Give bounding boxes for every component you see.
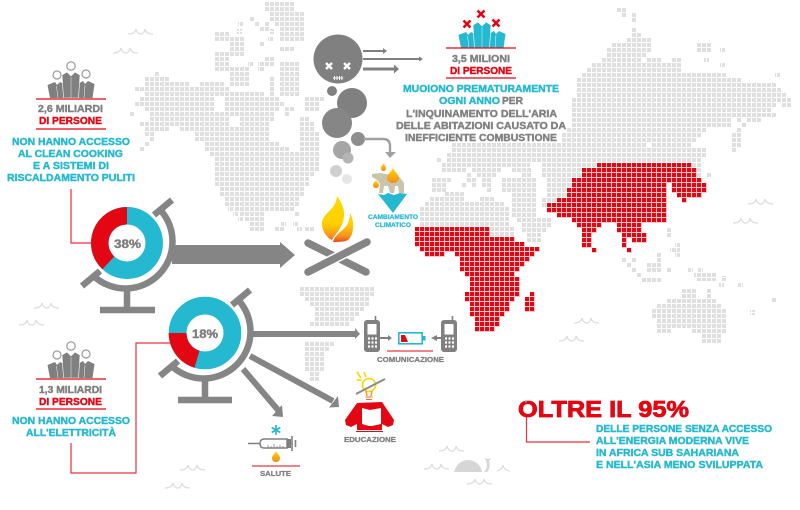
map: africa	[415, 192, 540, 332]
chart: globe donut 38%	[82, 200, 172, 310]
icon: climate change bear: CAMBIAMENTO	[368, 214, 418, 221]
text block: 2,6 miliardi: NON HANNO ACCESSO	[12, 137, 130, 148]
icon: people with red crosses	[458, 10, 506, 48]
text block: 2,6 miliardi: E A SISTEMI DI	[33, 161, 109, 172]
arrows: electricity outcomes	[243, 328, 360, 417]
icon: health	[248, 425, 300, 478]
callout: 95%: OLTRE IL 95%	[518, 396, 689, 422]
text block: 1,3 miliardi: DI PERSONE	[39, 397, 102, 408]
text block: 2,6 miliardi: DI PERSONE	[39, 116, 102, 127]
arrow: to fire	[172, 242, 295, 268]
icon: whale	[454, 458, 491, 472]
icon: climate change bear	[368, 163, 418, 229]
text block: 1,3 miliardi: ALL'ELETTRICITÀ	[26, 426, 117, 439]
connector: 38%	[71, 189, 92, 243]
chart: globe donut 18%	[160, 290, 250, 400]
icon: people lower	[48, 342, 94, 378]
callout: 95%	[518, 396, 772, 471]
callout: 95%: E NELL'ASIA MENO SVILUPPATA	[596, 460, 764, 471]
text block: 2,6 miliardi: 2,6 MILIARDI	[38, 104, 103, 115]
text block: 3,5 milioni: L'INQUINAMENTO DELL'ARIA	[406, 109, 558, 120]
text block: 1,3 miliardi: 1,3 MILIARDI	[39, 385, 102, 396]
text block: 3,5 milioni: DI PERSONE	[450, 66, 512, 77]
map: eurasia	[432, 8, 792, 315]
icon: skull smoke	[314, 34, 423, 184]
connector: 18%	[71, 343, 170, 473]
icon: fire	[308, 196, 367, 272]
chart: globe donut 38%: 38%	[114, 239, 141, 251]
text block: 3,5 milioni: DELLE ABITAZIONI CAUSATO DA	[396, 121, 567, 132]
text block: 3,5 milioni: OGNI ANNO	[439, 96, 500, 107]
world map	[130, 2, 792, 382]
text block: 3,5 milioni	[396, 10, 567, 144]
text block: 3,5 milioni: MUOIONO PREMATURAMENTE	[403, 84, 559, 95]
icon: communication	[364, 316, 457, 364]
map: australia	[652, 289, 727, 344]
icon: education: EDUCAZIONE	[344, 435, 396, 444]
text block: 1,3 miliardi: NON HANNO ACCESSO	[12, 416, 130, 427]
text block: 2,6 miliardi: RISCALDAMENTO PULITI	[7, 173, 135, 184]
callout: 95%: IN AFRICA SUB SAHARIANA	[596, 448, 740, 459]
text block: 3,5 milioni: PER	[502, 96, 524, 107]
icon: communication: COMUNICAZIONE	[377, 355, 444, 364]
text block: 3,5 milioni: INEFFICIENTE COMBUSTIONE	[405, 133, 557, 144]
text block: 2,6 miliardi: AL CLEAN COOKING	[18, 149, 123, 160]
text block: 3,5 milioni: 3,5 MILIONI	[452, 54, 510, 65]
icon: education	[344, 372, 396, 444]
icon: people	[48, 62, 94, 98]
icon: health: SALUTE	[260, 469, 291, 478]
chart: globe donut 18%: 18%	[192, 329, 218, 341]
text block: 2,6 miliardi	[7, 62, 135, 184]
map: americas	[130, 2, 375, 382]
icon: climate change bear: CLIMATICO	[375, 222, 411, 229]
callout: 95%: DELLE PERSONE SENZA ACCESSO	[596, 424, 772, 435]
text block: 1,3 miliardi	[12, 342, 130, 439]
callout: 95%: ALL'ENERGIA MODERNA VIVE	[596, 436, 749, 447]
